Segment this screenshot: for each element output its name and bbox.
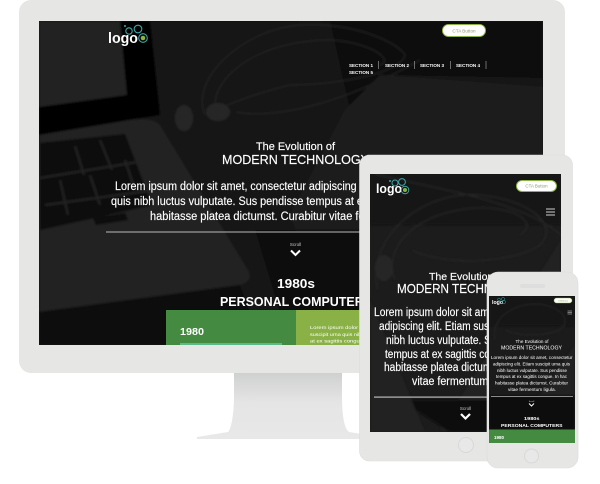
monitor stand [197,373,380,439]
phone timeline card: 1980 [494,435,505,440]
hero heading [222,142,369,164]
monitor frame [19,0,565,373]
phone section heading: PERSONAL COMPUTERS [501,423,563,429]
hero heading: MODERN TECHNOLOGY [222,153,370,167]
phone CTA button [554,298,572,303]
phone hamburger menu [568,311,572,314]
phone hero paragraph: habitasse platea dictumst. Curabitur [495,381,569,386]
tablet frame [360,155,572,461]
phone screen [489,296,575,443]
navigation: SECTION 3 [420,63,445,68]
tablet hero paragraph: adipiscing elit. Etiam suscipit urna quis [379,321,551,333]
section heading [220,279,360,306]
hero paragraph [111,180,360,223]
tablet hero paragraph: nibh luctus vulputate. Sus pendisse [386,335,545,347]
CTA button: CTA Button [452,28,476,33]
phone hero paragraph: Lorem ipsum dolor sit amet, consectetur [491,355,573,360]
tablet CTA button: CTA Button [525,184,548,189]
tablet hamburger menu [546,209,555,215]
CTA button [442,24,486,36]
logo [108,25,147,47]
tablet background photo [370,174,561,432]
hero paragraph: Lorem ipsum dolor sit amet, consectetur adipiscing elit. Etiam suscipit urna [115,181,471,193]
tablet home button [458,438,474,452]
phone hero paragraph: nibh luctus vulputate. Sus pendisse [497,368,568,373]
tablet scroll indicator: Scroll [460,406,471,411]
tablet hero heading [398,272,491,294]
hero paragraph: quis nibh luctus vulputate. Sus pendisse tempus at ex sagittis congue. In hac [111,196,479,208]
phone hero heading: MODERN TECHNOLOGY [501,346,563,352]
logo: logo [108,31,138,47]
phone CTA button: CTA Button [558,300,568,302]
scroll indicator [290,242,301,255]
phone scroll indicator: Scroll [529,400,535,403]
timeline card [166,310,360,345]
tablet hero paragraph: Lorem ipsum dolor sit amet, consectetur [374,307,556,319]
phone section heading [501,417,562,427]
scroll indicator: Scroll [290,242,301,247]
navigation: SECTION 5 [349,70,374,75]
section heading: PERSONAL COMPUTERS [220,294,372,309]
phone hero paragraph: vitae fermentum ligula. [508,387,556,392]
tablet hero heading: MODERN TECHNOLOGY [397,282,535,296]
phone background photo [490,394,574,429]
tablet hero paragraph: vitae fermentum ligula. [412,376,519,388]
tablet hero paragraph: tempus at ex sagittis congue. In hac [385,349,545,361]
tablet hero paragraph: habitasse platea dictumst. Curabitur [384,362,547,374]
phone logo: logo [492,300,504,306]
hero heading: The Evolution of [256,141,336,153]
timeline card: suscipit urna quis nibh luctus [310,332,381,338]
phone scroll indicator [529,400,535,406]
phone hero paragraph [491,355,573,392]
tablet logo: logo [376,181,402,196]
tablet screen [370,174,561,432]
phone hero heading: The Evolution of [516,339,549,344]
timeline card: Lorem ipsum dolor sit amet [310,325,381,331]
navigation: SECTION 1 [349,63,374,68]
section heading: 1980s [277,276,315,291]
phone speaker [520,284,545,288]
phone hero paragraph: adipiscing elit. Etiam suscipit urna quis [493,361,570,366]
phone hero heading [501,340,562,350]
background photo: laptop and earphones [39,21,249,311]
timeline card: at ex sagittis congue in hac [310,338,381,344]
phone timeline card [489,430,575,443]
tablet scroll indicator [460,406,471,418]
phone logo [492,298,506,306]
hero paragraph: habitasse platea dictumst. Curabitur vitae fermentum ligula. [150,211,440,223]
tablet hero paragraph [374,306,487,386]
timeline card: 1980 [180,326,204,338]
monitor screen [39,21,543,345]
phone hero paragraph: tempus at ex sagittis congue. In hac [496,374,568,379]
phone section heading: 1980s [524,416,540,421]
navigation: SECTION 4 [456,63,481,68]
navigation: SECTION 2 [385,63,410,68]
navigation [349,61,486,75]
tablet CTA button [516,180,556,192]
tablet hero heading: The Evolution of [429,271,505,283]
phone home button [524,449,538,463]
phone frame [487,272,578,468]
